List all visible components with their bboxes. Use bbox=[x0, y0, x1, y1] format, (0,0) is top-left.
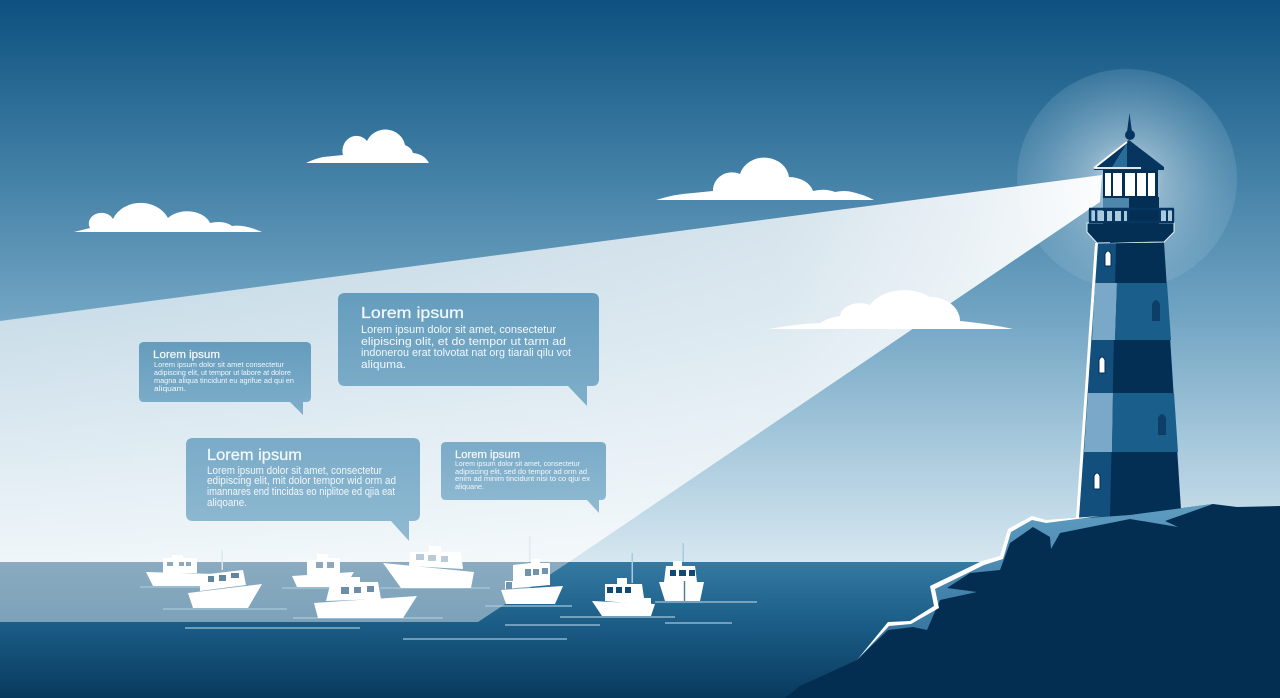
body text: imannares end tincidas eo niplitoe ed qjia eat bbox=[207, 486, 395, 498]
bubble bbox=[139, 342, 311, 415]
heading: Lorem ipsum bbox=[455, 449, 520, 461]
cliff base bbox=[785, 504, 1280, 698]
callout: small right bbox=[441, 442, 606, 513]
cloud: upper left bbox=[74, 203, 262, 232]
body text: edipiscing elit, mit dolor tempor wid orm ad bbox=[207, 475, 396, 487]
cliff white edge bbox=[857, 516, 1100, 660]
body text: Lorem ipsum dolor sit amet, consectetur bbox=[207, 465, 382, 477]
lower light band bbox=[1084, 393, 1113, 452]
body text: magna aliqua tincidunt eu agrifue ad qui en bbox=[154, 376, 294, 385]
tower right side bbox=[1109, 242, 1181, 518]
callout: large bottom bbox=[186, 438, 420, 541]
roof finial ball bbox=[1125, 130, 1135, 140]
tower left side bbox=[1079, 243, 1116, 518]
railing bbox=[1089, 209, 1174, 222]
boat E bbox=[383, 528, 474, 588]
cloud: upper centre bbox=[306, 130, 429, 163]
cliff lit rim bbox=[857, 504, 1213, 660]
gallery plate bbox=[1087, 223, 1174, 243]
body text: adipiscing elit, sed do tempor ad orm ad bbox=[455, 469, 587, 476]
boat G bbox=[592, 553, 655, 616]
lighthouse glow halo bbox=[1017, 69, 1237, 289]
window dark 2 bbox=[1158, 414, 1166, 435]
heading: Lorem ipsum bbox=[361, 305, 464, 322]
body text: aliquane. bbox=[455, 484, 484, 491]
gallery plate right cover bbox=[1110, 224, 1173, 243]
lower mid band bbox=[1112, 393, 1178, 452]
roof spire bbox=[1127, 113, 1132, 132]
bubble bbox=[441, 442, 606, 513]
lantern windows bbox=[1105, 173, 1155, 196]
roof bbox=[1094, 140, 1164, 170]
cliff bbox=[785, 504, 1280, 698]
body text bbox=[154, 360, 294, 393]
railing light panels bbox=[1092, 211, 1172, 221]
callout: large top bbox=[338, 293, 599, 406]
boat B bbox=[188, 550, 262, 608]
window white 2 bbox=[1099, 357, 1105, 373]
lantern room bbox=[1103, 170, 1158, 198]
body text bbox=[207, 465, 396, 509]
window white 1 bbox=[1105, 251, 1111, 266]
body text: indonerou erat tolvotat nat org tiarali qilu vot bbox=[361, 347, 571, 359]
roof light facet bbox=[1112, 143, 1127, 167]
lantern base left light bbox=[1103, 198, 1129, 209]
lighthouse bbox=[1076, 113, 1181, 518]
cloud: inside beam bbox=[769, 290, 1013, 329]
window dark 1 bbox=[1152, 300, 1160, 321]
body text: aliqoane. bbox=[207, 497, 247, 509]
lantern base bbox=[1103, 197, 1159, 224]
light beam bbox=[0, 175, 1102, 622]
bubble bbox=[186, 438, 420, 541]
upper mid band bbox=[1115, 283, 1171, 340]
beam over sky bbox=[0, 175, 1102, 562]
body text: aliquma. bbox=[361, 359, 406, 371]
boat D bbox=[314, 577, 417, 618]
boat H bbox=[659, 543, 704, 601]
body text: elipiscing olit, et do tempor ut tarm ad bbox=[361, 336, 566, 348]
body text: Lorem ipsum dolor sit amet, consectetur bbox=[361, 324, 556, 336]
heading: Lorem ipsum bbox=[153, 349, 220, 361]
water ripples bbox=[140, 587, 757, 639]
sea bbox=[0, 562, 1280, 698]
body text: aliquam. bbox=[154, 384, 186, 393]
body text bbox=[361, 324, 571, 371]
boat F bbox=[501, 536, 563, 604]
beam over sea bbox=[0, 562, 569, 622]
body text: Lorem ipsum dolor sit amet consectetur bbox=[154, 360, 285, 369]
body text: adipiscing elit, ut tempor ut labore at dolore bbox=[154, 368, 291, 377]
cloud: upper right bbox=[656, 158, 874, 200]
window white 3 bbox=[1094, 473, 1100, 489]
callout: small left bbox=[139, 342, 311, 415]
upper light band bbox=[1092, 283, 1117, 340]
body text: enim ad minim tincidunt nisi to co qjui ex bbox=[455, 476, 591, 483]
roof white edge bbox=[1094, 142, 1141, 168]
boat C bbox=[292, 554, 354, 587]
body text bbox=[455, 461, 591, 491]
tower base white edge bbox=[1076, 243, 1099, 518]
boat A bbox=[146, 555, 215, 586]
bubble bbox=[338, 293, 599, 406]
body text: Lorem ipsum dolor sit amet, consectetur bbox=[455, 461, 581, 468]
heading: Lorem ipsum bbox=[207, 447, 302, 464]
